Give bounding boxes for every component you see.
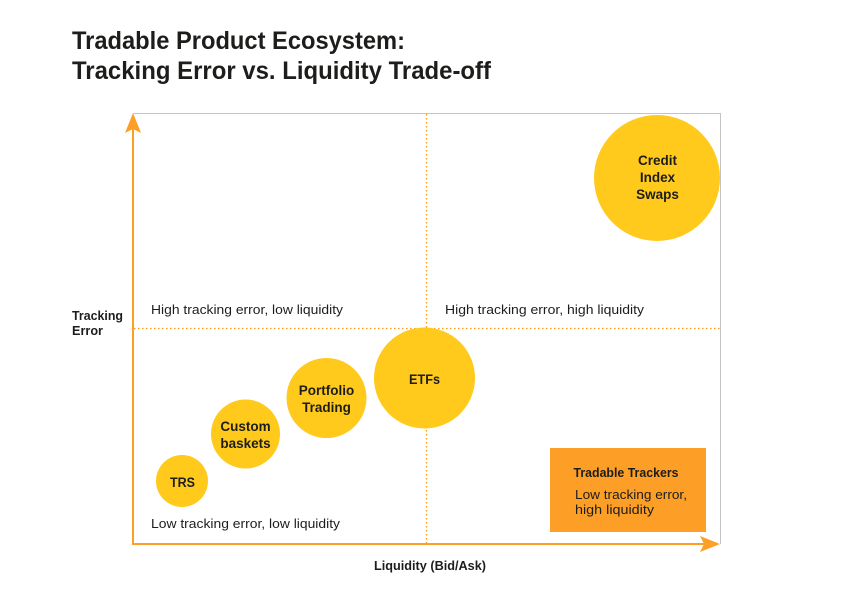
- label: y axis: Tracking: [72, 309, 123, 323]
- title: [72, 27, 492, 85]
- title: Tracking Error vs. Liquidity Trade-off: [72, 57, 492, 85]
- title: Tradable Product Ecosystem:: [72, 27, 405, 55]
- arrow: x axis: [132, 536, 720, 552]
- bubble: Custom baskets: [211, 400, 280, 468]
- bubble: TRS: [156, 455, 208, 507]
- label: y axis: Error: [72, 324, 103, 338]
- bubble: ETFs: ETFs: [409, 372, 440, 387]
- callout: Tradable Trackers: Low tracking error,: [575, 487, 687, 502]
- quadrant label: bottom left: Low tracking error, low liquidity: [151, 516, 341, 531]
- label: x axis: Liquidity (Bid/Ask): [374, 559, 486, 573]
- bubble: Portfolio Trading: Trading: [302, 400, 351, 415]
- quadrant label: top left: High tracking error, low liquidity: [151, 302, 344, 317]
- bubble: Custom baskets: Custom: [220, 419, 271, 434]
- callout: Tradable Trackers: Tradable Trackers: [574, 466, 679, 480]
- callout: Tradable Trackers: [550, 448, 706, 532]
- bubble: ETFs: [374, 328, 475, 428]
- quadrant label: top right: High tracking error, high liquidity: [445, 302, 645, 317]
- bubble: Credit Index Swaps: Credit: [638, 153, 678, 168]
- bubble: Portfolio Trading: [286, 358, 366, 438]
- callout: Tradable Trackers: high liquidity: [575, 502, 655, 517]
- bubble: Credit Index Swaps: Index: [640, 170, 676, 185]
- arrow: y axis: [125, 113, 141, 544]
- bubble: Credit Index Swaps: [594, 115, 720, 241]
- chart: tracking error vs liquidity quadrant: [72, 113, 720, 573]
- bubble: TRS: TRS: [170, 475, 195, 490]
- bubble: Portfolio Trading: Portfolio: [299, 383, 354, 398]
- bubble: Credit Index Swaps: Swaps: [636, 187, 679, 202]
- bubble: Custom baskets: baskets: [220, 436, 271, 451]
